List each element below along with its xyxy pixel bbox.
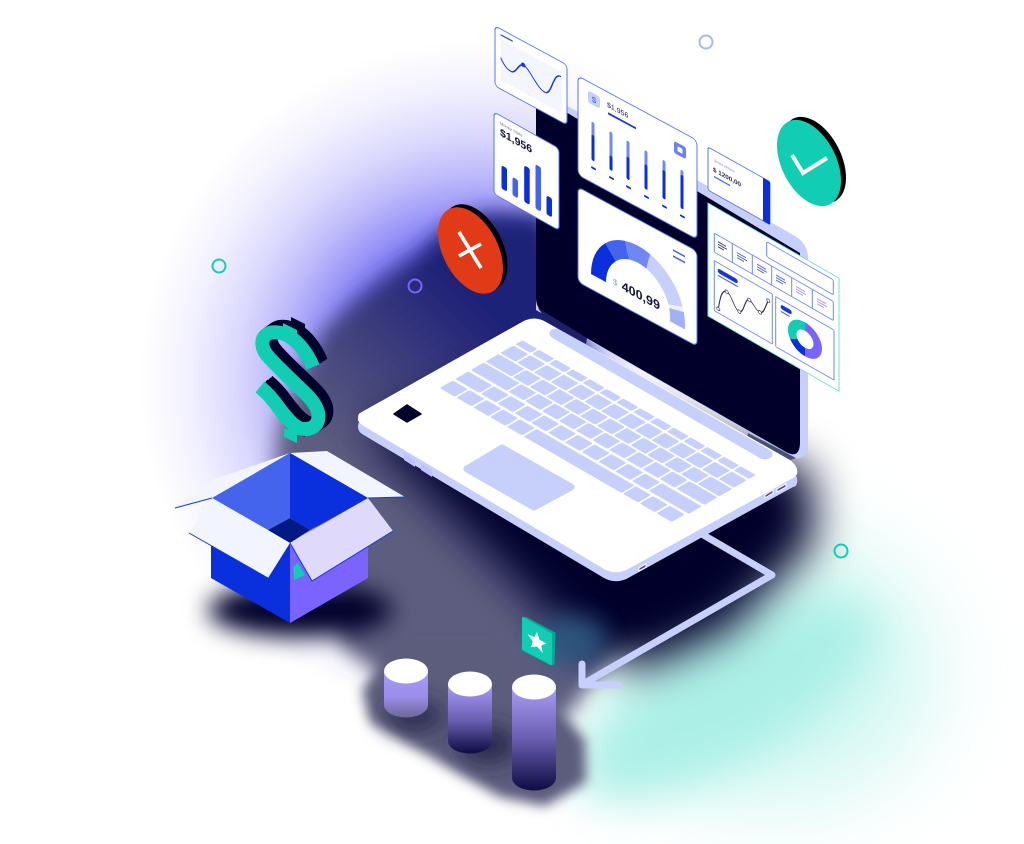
laptop bbox=[358, 88, 808, 581]
line chart panel bbox=[714, 261, 772, 344]
open box bbox=[175, 451, 405, 623]
search box bbox=[767, 242, 833, 295]
hinge left bbox=[538, 308, 587, 344]
icon: dollar sign bbox=[260, 317, 326, 443]
cylinder tall bbox=[512, 674, 556, 790]
card: wave chart bbox=[495, 26, 567, 125]
donut chart panel bbox=[776, 297, 834, 380]
card value: $1,956 bbox=[607, 100, 628, 120]
cylinder chart bbox=[384, 658, 556, 790]
box front left flap bbox=[189, 498, 290, 578]
touchpad bbox=[467, 448, 571, 507]
box back right flap bbox=[290, 451, 405, 498]
laptop base top bbox=[358, 318, 797, 572]
bar chart bbox=[502, 145, 552, 218]
box back left flap bbox=[175, 453, 290, 507]
box inside left bbox=[212, 453, 290, 530]
card: money stats bars bbox=[494, 112, 559, 230]
cylinder medium bbox=[448, 672, 492, 754]
decorative ring: teal right bbox=[834, 544, 848, 558]
box sticker bbox=[293, 563, 305, 580]
card: gauge bbox=[578, 187, 697, 346]
box front left face bbox=[211, 540, 290, 623]
icon: square tile bbox=[674, 141, 686, 159]
card label: Series 287843 bbox=[714, 159, 735, 174]
laptop screen bbox=[536, 94, 800, 454]
card: analytics dashboard bbox=[708, 203, 839, 391]
icon: dollar tile bbox=[588, 90, 600, 109]
card: series total bbox=[708, 147, 770, 225]
gauge value: 400,99 bbox=[622, 278, 660, 313]
icon: menu lines bbox=[673, 249, 685, 263]
laptop screen back rim bbox=[536, 88, 808, 459]
icon: dollar tile: $ bbox=[592, 94, 596, 106]
icon: green check badge bbox=[777, 103, 846, 220]
keyboard bbox=[440, 340, 756, 523]
ports bbox=[639, 484, 786, 571]
power button bbox=[394, 405, 421, 422]
gauge currency: $ bbox=[613, 276, 618, 288]
icon: red cross badge bbox=[438, 190, 508, 308]
progress bar chart bbox=[591, 121, 685, 219]
side vents bbox=[404, 453, 432, 477]
box inside right bbox=[290, 453, 368, 530]
box front right flap bbox=[290, 498, 393, 581]
gauge chart bbox=[591, 220, 685, 329]
background glow bbox=[140, 40, 935, 839]
decorative ring: periwinkle top bbox=[700, 36, 712, 48]
laptop base side bbox=[358, 328, 797, 581]
hinge right bbox=[747, 433, 796, 460]
decorative ring: teal left bbox=[212, 260, 226, 272]
icon: star tile bbox=[522, 617, 555, 665]
card value: $ 1200,00 bbox=[713, 167, 741, 189]
stat cells row bbox=[714, 233, 833, 320]
box front right face bbox=[290, 540, 368, 623]
card: progress bars bbox=[578, 76, 697, 239]
arrow from laptop to cylinders bbox=[582, 533, 772, 685]
cylinder short bbox=[384, 658, 428, 718]
card value: $1,956 bbox=[500, 127, 532, 156]
hinge recess strip bbox=[549, 328, 773, 459]
card label: Money Stats bbox=[500, 121, 522, 138]
decorative ring: purple bbox=[408, 280, 422, 292]
box inside floor bbox=[268, 518, 310, 543]
